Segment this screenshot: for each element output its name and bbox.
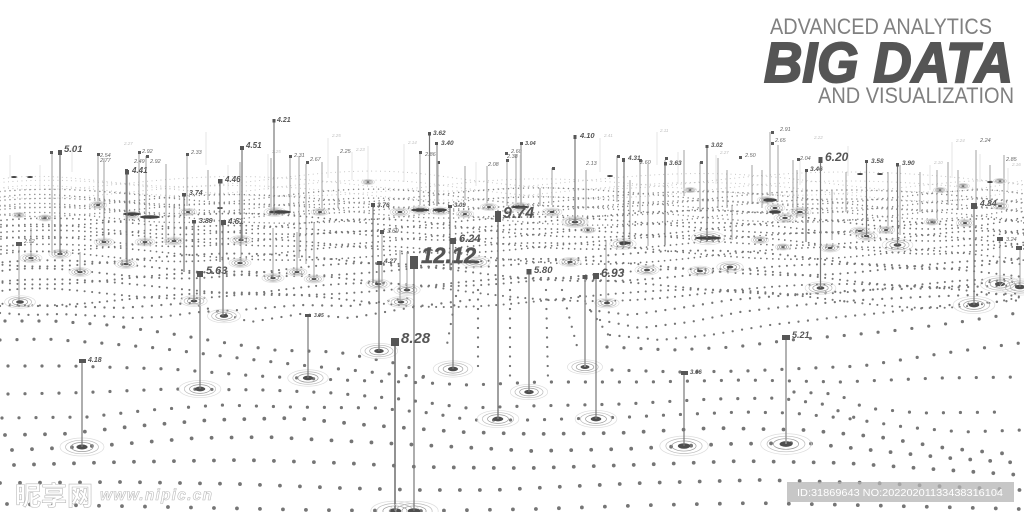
marker: 3.76: 3.76	[377, 202, 390, 209]
small background markers	[12, 127, 1024, 308]
small background markers: 2.33	[190, 150, 203, 156]
marker: 6.93: 6.93	[601, 266, 625, 280]
marker: 3.74: 3.74	[189, 190, 203, 197]
faint distant markers	[10, 128, 1021, 190]
dotted terrain: far band	[0, 171, 1024, 380]
marker: 3.09	[448, 203, 466, 270]
marker: 3.58: 3.58	[871, 158, 884, 165]
small background markers: 2.85	[1005, 157, 1018, 163]
marker: 9.74	[477, 205, 534, 428]
marker: 5.63: 5.63	[206, 265, 227, 277]
small background markers: 2.60	[639, 160, 652, 166]
marker: 3.02	[706, 143, 723, 238]
marker: 5.80	[510, 265, 553, 400]
marker: 3.58	[856, 158, 884, 240]
marker: 3.74	[182, 190, 203, 272]
marker: 4.41	[125, 166, 148, 264]
small background markers: 2.67	[309, 157, 322, 163]
marker: 4.18	[60, 357, 104, 456]
marker: 6.24	[433, 233, 480, 377]
faint distant markers: 2.25	[331, 133, 341, 138]
marker: 5.80: 5.80	[534, 265, 553, 276]
marker: 4.10: 4.10	[579, 131, 595, 140]
marker: 4.51: 4.51	[245, 141, 262, 150]
faint distant markers: 2.27	[123, 141, 133, 146]
small background markers: 2.54	[99, 153, 111, 159]
small background markers: 2.91	[779, 127, 791, 133]
title: Advanced Analytics: ADVANCED ANALYTICS	[770, 14, 992, 39]
faint distant markers: 2.25	[271, 149, 281, 154]
marker: 3.89: 3.89	[199, 218, 213, 225]
small background markers: 2.50	[744, 153, 757, 159]
marker: 3.63: 3.63	[669, 160, 682, 167]
small background markers: 2.92	[149, 159, 161, 165]
marker: 3.66	[660, 370, 708, 456]
watermark: site name	[15, 481, 212, 511]
marker: 6.93	[575, 266, 625, 428]
small background markers: 2.08	[487, 162, 500, 168]
marker: unlabelled column	[567, 275, 603, 374]
marker: 3.02: 3.02	[711, 143, 723, 149]
marker: 5.01: 5.01	[64, 144, 82, 155]
faint distant markers: 2.41	[603, 133, 613, 138]
marker: 4.41: 4.41	[131, 166, 148, 175]
faint distant markers: 2.23	[355, 147, 365, 152]
marker: 5.63	[179, 265, 227, 398]
watermark: site name: 昵享网	[15, 481, 93, 511]
marker: 4.10	[562, 131, 595, 227]
faint distant markers: 2.22	[813, 135, 823, 140]
marker: 3.40	[435, 140, 454, 206]
marker: 3.04: 3.04	[525, 141, 536, 147]
marker: 4.61	[208, 217, 244, 323]
small background markers: 2.60	[510, 149, 523, 155]
dotted terrain: near rows	[0, 312, 1024, 432]
small background markers: 2.04	[799, 156, 811, 162]
marker: 3.63	[664, 160, 682, 245]
marker: 4.18: 4.18	[87, 357, 102, 364]
marker: 3.90	[882, 160, 915, 251]
marker: 4.61: 4.61	[227, 217, 244, 226]
small background markers: 3.69	[387, 229, 399, 235]
marker: 9.74: 9.74	[503, 205, 534, 222]
marker: 4.46	[218, 175, 241, 262]
marker: 4.21	[272, 117, 291, 213]
marker: 3.76	[371, 202, 390, 283]
marker: 8.28	[371, 330, 431, 512]
small background markers: 3.24	[1006, 237, 1017, 243]
marker: 3.05: 3.05	[314, 313, 324, 319]
small background markers: 2.25	[339, 149, 352, 155]
small background markers: 2.38	[506, 154, 519, 160]
marker: 6.24: 6.24	[459, 233, 480, 245]
small background markers: 2.13	[585, 161, 598, 167]
marker: 3.46	[805, 166, 823, 242]
faint distant markers: 2.14	[407, 140, 417, 145]
marker: 4.84	[953, 198, 997, 314]
small background markers: 2.65	[774, 138, 787, 144]
marker: 5.21: 5.21	[792, 330, 810, 340]
marker: 6.20	[805, 150, 849, 294]
marker: 4.51	[240, 141, 262, 240]
marker: 3.52	[5, 296, 35, 308]
marker: 4.46: 4.46	[224, 175, 241, 184]
marker: 4.31	[622, 155, 641, 245]
marker: 8.28: 8.28	[401, 330, 431, 347]
marker: 3.09: 3.09	[454, 203, 466, 209]
marker: 3.40: 3.40	[441, 140, 454, 147]
faint distant markers: 2.10	[933, 160, 943, 165]
dark data point clusters	[11, 173, 993, 245]
marker: 12.12: 12.12	[421, 243, 477, 268]
marker: 4.31: 4.31	[627, 155, 641, 162]
marker: 3.89	[181, 218, 213, 306]
marker: 5.21	[761, 330, 811, 454]
small background markers: 2.86	[424, 152, 437, 158]
small background markers: 2.49	[133, 159, 145, 165]
marker: 5.01	[58, 144, 82, 255]
small background markers: 2.31	[293, 153, 305, 159]
small background markers: 2.24	[979, 138, 991, 144]
marker: 4.27: 4.27	[383, 258, 397, 265]
marker: 3.46: 3.46	[810, 166, 823, 173]
faint distant markers: 2.11	[659, 128, 669, 133]
marker: 3.66: 3.66	[690, 370, 702, 376]
marker: 3.62	[428, 130, 446, 206]
small background markers: 2.92	[141, 149, 153, 155]
marker: 4.27	[360, 258, 398, 359]
faint distant markers: 2.27	[719, 150, 729, 155]
small background markers: 2.77	[99, 158, 112, 164]
marker: 4.84: 4.84	[979, 198, 997, 208]
marker: 12.12	[390, 243, 477, 512]
marker: 3.62: 3.62	[433, 130, 446, 137]
small background markers: 2.52	[23, 239, 35, 245]
watermark: image id bar	[787, 482, 1014, 502]
marker: 3.05	[288, 313, 328, 386]
watermark: site name: www.nipic.cn	[100, 487, 212, 504]
title: Big Data: BIG DATA	[764, 31, 1013, 95]
marker: 3.90: 3.90	[902, 160, 915, 167]
marker: 6.20: 6.20	[825, 150, 849, 164]
watermark: image id bar: ID:31869643 NO:20220201133438316104	[797, 487, 1003, 499]
faint distant markers: 2.16	[1011, 162, 1021, 167]
marker: 3.04	[520, 141, 536, 205]
marker: 4.21: 4.21	[276, 117, 291, 124]
faint distant markers: 2.24	[955, 138, 965, 143]
